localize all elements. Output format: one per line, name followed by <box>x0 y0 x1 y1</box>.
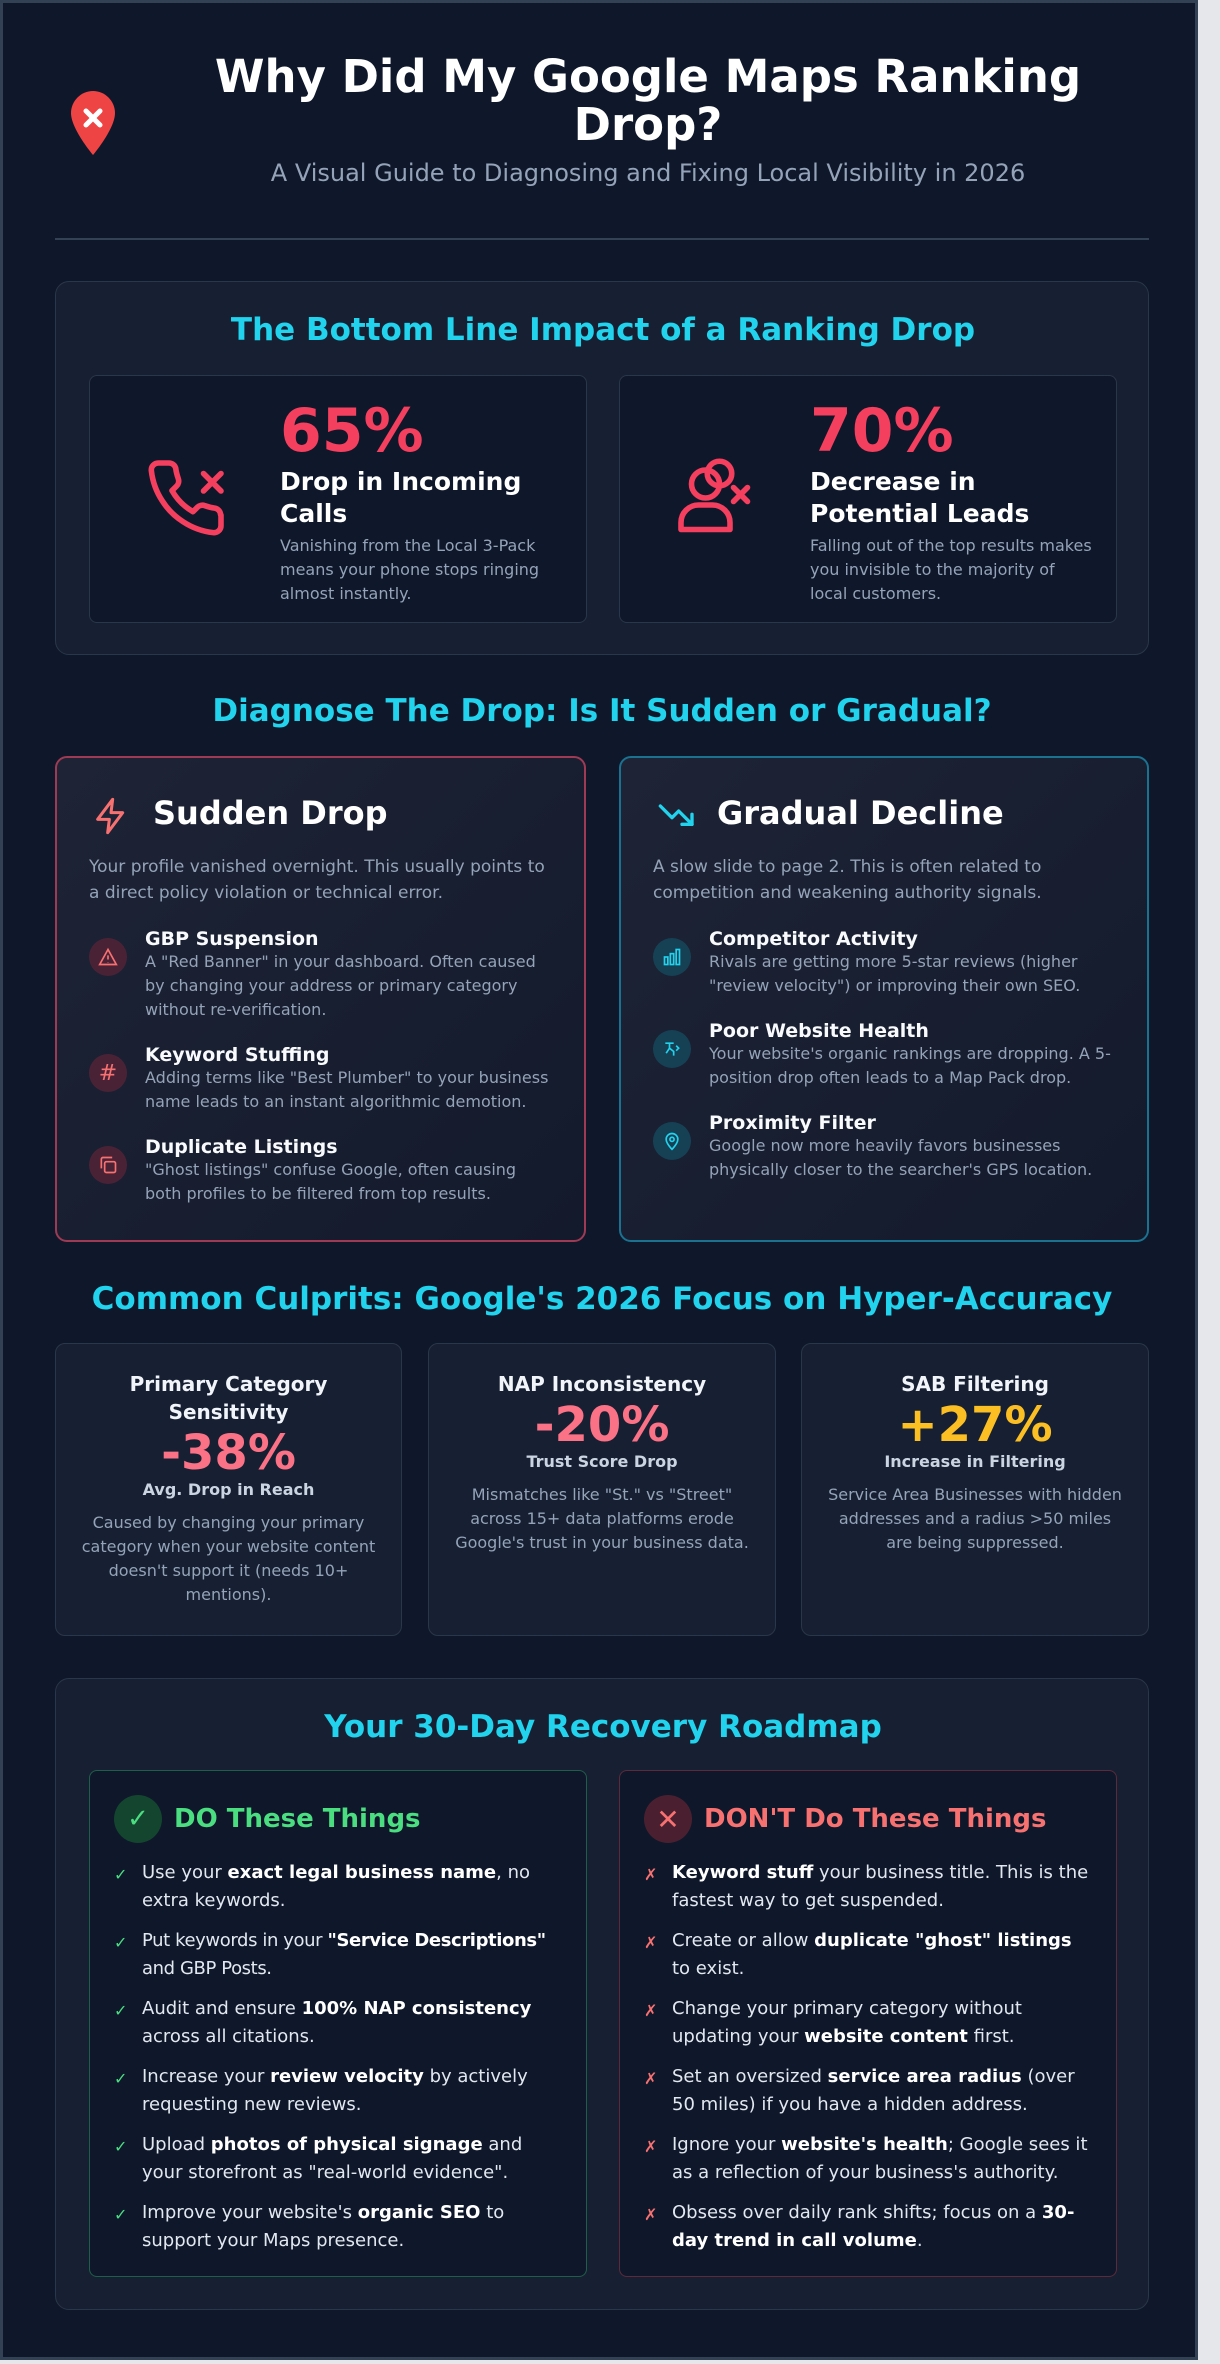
panel: sudden drop: A "Red Banner" in your dashboard. Often caused by changing your address or primary category without re-verification. <box>145 952 536 1019</box>
list: dont items: Ignore your website's health; Google sees it as a reflection of your business's authority. <box>672 2134 1088 2183</box>
panel: gradual decline: Poor Website Health <box>709 1020 929 1042</box>
card: NAP inconsistency: Mismatches like "St." vs "Street" across 15+ data platforms erode Google's trust in your business data. <box>455 1485 749 1552</box>
item: duplicate listings <box>89 1136 516 1203</box>
panel: gradual decline: Proximity Filter <box>709 1112 876 1134</box>
card: 65% calls <box>89 375 587 623</box>
panel: gradual decline: Your website's organic rankings are dropping. A 5-position drop often leads to a Map Pack drop. <box>709 1044 1111 1087</box>
card: SAB filtering: SAB Filtering <box>901 1372 1049 1396</box>
panel: gradual decline: Google now more heavily favors businesses physically closer to the searcher's GPS location. <box>709 1136 1092 1179</box>
list: do items: Increase your review velocity by actively requesting new reviews. <box>142 2066 528 2115</box>
stat text: Vanishing from the Local 3-Pack means your phone stops ringing almost instantly. <box>280 536 539 603</box>
heading: do: DO These Things <box>174 1804 421 1834</box>
heading: bottom line: The Bottom Line Impact of a Ranking Drop <box>231 312 975 348</box>
panel: sudden drop: Adding terms like "Best Plumber" to your business name leads to an instant algorithmic demotion. <box>145 1068 548 1111</box>
list: do items: Upload photos of physical signage and your storefront as "real-world evidence". <box>142 2134 522 2183</box>
panel: gradual decline <box>619 756 1149 1242</box>
card: SAB filtering <box>801 1343 1149 1636</box>
panel: gradual decline: Competitor Activity <box>709 928 918 950</box>
card: NAP inconsistency: -20% <box>535 1397 669 1453</box>
heading: do <box>114 1795 421 1843</box>
panel: sudden drop: "Ghost listings" confuse Google, often causing both profiles to be filtered from top results. <box>145 1160 516 1203</box>
panel: sudden drop: Duplicate Listings <box>145 1136 338 1158</box>
list: do items: ✓ <box>114 1933 127 1952</box>
card: don't do these things <box>619 1770 1117 2277</box>
list: do items: Improve your website's organic SEO to support your Maps presence. <box>142 2202 504 2251</box>
list: do items: Use your exact legal business name, no extra keywords. <box>142 1862 530 1911</box>
card: SAB filtering: Service Area Businesses with hidden addresses and a radius >50 miles are being suppressed. <box>828 1485 1122 1552</box>
card: SAB filtering: Increase in Filtering <box>884 1452 1066 1471</box>
list: dont items: Change your primary category without updating your website content first. <box>672 1998 1022 2047</box>
list: do items: ✓ <box>114 2137 127 2156</box>
stat text: 65% <box>280 396 424 466</box>
list: dont items: Create or allow duplicate "ghost" listings to exist. <box>672 1930 1072 1979</box>
stat text: 70% <box>810 396 954 466</box>
list: do items <box>114 1862 546 2251</box>
panel: sudden drop <box>55 756 586 1242</box>
list: dont items: ✗ <box>644 2137 657 2156</box>
card: SAB filtering: +27% <box>897 1397 1053 1453</box>
heading: dont <box>644 1795 1046 1843</box>
heading: diagnose: Diagnose The Drop: Is It Sudden or Gradual? <box>212 693 992 729</box>
stat text <box>810 396 1092 603</box>
card: primary category <box>55 1343 402 1636</box>
item: poor website health <box>653 1020 1111 1087</box>
panel: recovery roadmap <box>55 1678 1149 2310</box>
list: do items: Audit and ensure 100% NAP consistency across all citations. <box>142 1998 531 2047</box>
list: dont items: ✗ <box>644 2205 657 2224</box>
intro text: A slow slide to page 2. This is often related to competition and weakening authority signals. <box>653 857 1042 903</box>
list: dont items: Obsess over daily rank shifts; focus on a 30-day trend in call volume. <box>672 2202 1074 2251</box>
card: do these things <box>89 1770 587 2277</box>
list: dont items: ✗ <box>644 1933 657 1952</box>
item: proximity filter <box>653 1112 1092 1179</box>
heading: do: ✓ <box>127 1804 149 1834</box>
panel: sudden drop: # <box>99 1060 117 1086</box>
card: 70% leads <box>619 375 1117 623</box>
list: dont items: ✗ <box>644 2001 657 2020</box>
list: do items: ✓ <box>114 2001 127 2020</box>
icon: map pin with x <box>71 91 115 155</box>
heading: dont: ✕ <box>656 1802 680 1836</box>
list: dont items: ✗ <box>644 1865 657 1884</box>
panel: sudden drop: Keyword Stuffing <box>145 1044 329 1066</box>
stat text: Decrease in Potential Leads <box>810 467 1029 528</box>
stat text: Falling out of the top results makes you invisible to the majority of local customers. <box>810 536 1092 603</box>
intro text: Your profile vanished overnight. This usually points to a direct policy violation or technical error. <box>89 857 545 903</box>
list: dont items: Set an oversized service area radius (over 50 miles) if you have a hidden address. <box>672 2066 1075 2115</box>
list: do items: ✓ <box>114 2069 127 2088</box>
panel: sudden drop: GBP Suspension <box>145 928 319 950</box>
card: NAP inconsistency <box>428 1343 776 1636</box>
card: primary category: Primary Category Sensitivity <box>130 1372 327 1424</box>
subtitle: A Visual Guide to Diagnosing and Fixing Local Visibility in 2026 <box>271 159 1025 187</box>
item: GBP suspension <box>89 928 536 1019</box>
icon: phone x <box>148 460 224 536</box>
title: Drop? <box>574 98 722 151</box>
list: dont items: Keyword stuff your business title. This is the fastest way to get suspended. <box>672 1862 1088 1911</box>
card: primary category: -38% <box>161 1425 296 1481</box>
heading: gradual decline: Gradual Decline <box>717 794 1004 832</box>
list: do items: ✓ <box>114 2205 127 2224</box>
icon: users x <box>678 458 750 532</box>
item: keyword stuffing <box>89 1044 548 1111</box>
panel: gradual decline: Rivals are getting more 5-star reviews (higher "review velocity") or improving their own SEO. <box>709 952 1080 995</box>
stat text <box>280 396 539 603</box>
list: dont items <box>644 1862 1088 2251</box>
card: NAP inconsistency: NAP Inconsistency <box>498 1372 706 1396</box>
icon: lightning <box>96 798 124 834</box>
card: NAP inconsistency: Trust Score Drop <box>526 1452 678 1471</box>
card: primary category: Avg. Drop in Reach <box>143 1480 314 1499</box>
icon: trending down <box>658 804 694 826</box>
card: primary category: Caused by changing your primary category when your website content doesn't support it (needs 10+ mentions). <box>82 1513 375 1604</box>
list: do items: Put keywords in your "Service Descriptions" and GBP Posts. <box>142 1930 546 1979</box>
list: dont items: ✗ <box>644 2069 657 2088</box>
heading: dont: DON'T Do These Things <box>704 1804 1046 1834</box>
panel: bottom line impact <box>55 281 1149 655</box>
list: do items: ✓ <box>114 1865 127 1884</box>
item: competitor activity <box>653 928 1080 995</box>
heading: roadmap: Your 30-Day Recovery Roadmap <box>324 1709 882 1745</box>
title: Why Did My Google Maps Ranking <box>215 50 1081 103</box>
heading: sudden drop: Sudden Drop <box>153 794 388 832</box>
heading: common culprits: Common Culprits: Google's 2026 Focus on Hyper-Accuracy <box>92 1281 1112 1317</box>
stat text: Drop in Incoming Calls <box>280 467 521 528</box>
title <box>215 50 1081 151</box>
